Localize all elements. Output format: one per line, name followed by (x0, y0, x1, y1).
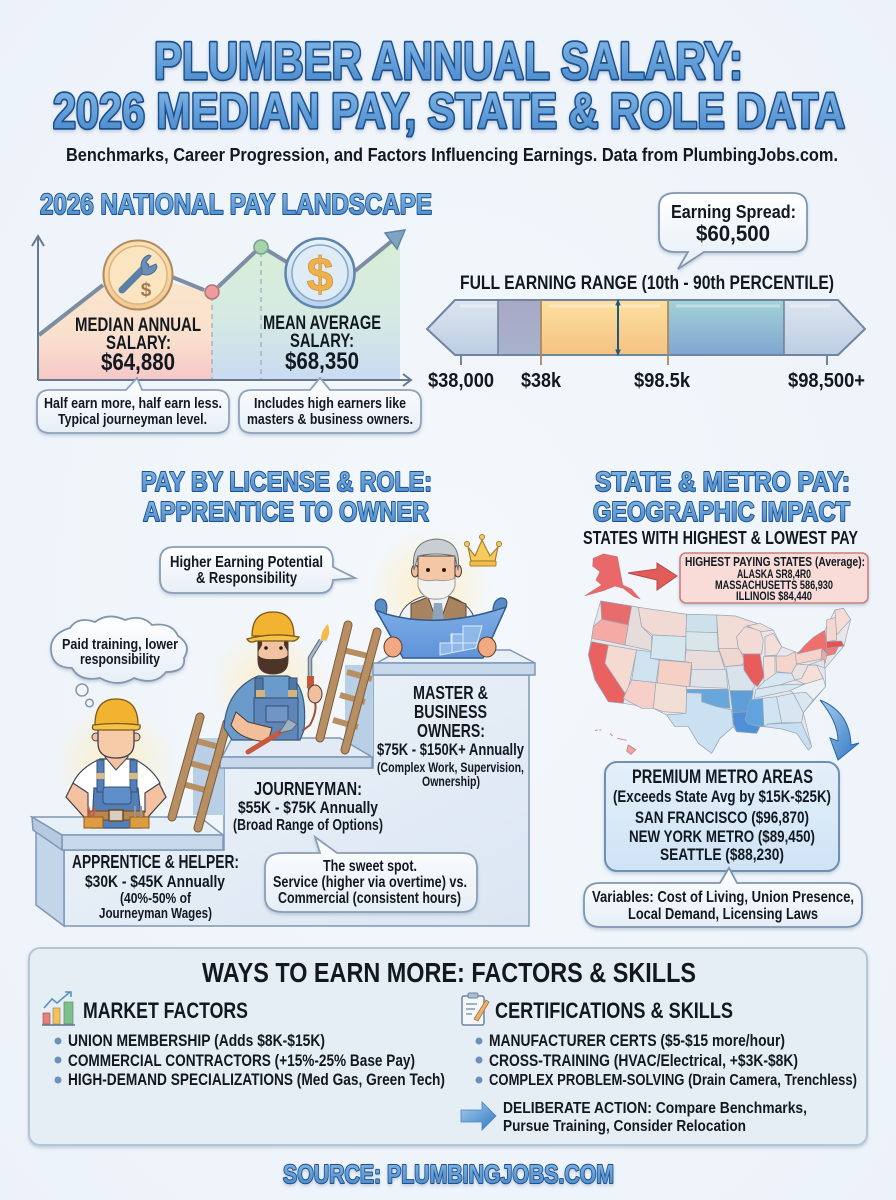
callout: thought cloud (51, 616, 187, 707)
callout: median note: Half earn more, half earn less. (44, 395, 222, 412)
panel: premium metro areas: NEW YORK METRO ($89,450) (629, 827, 815, 846)
stat: median salary: $64,880 (101, 349, 175, 376)
icon: torch (302, 624, 329, 731)
label: journeyman (233, 779, 383, 834)
callout: thought cloud: responsibility (80, 651, 161, 668)
callout: thought cloud: Paid training, lower (62, 636, 178, 653)
heading: pay by license and role: APPRENTICE TO OWNER (143, 496, 429, 527)
callout: earning spread: Earning Spread: (671, 202, 796, 222)
label: journeyman: JOURNEYMAN: (254, 779, 362, 799)
callout: highest paying states (680, 553, 868, 603)
stat: mean salary (263, 312, 381, 375)
callout: the sweet spot: Commercial (consistent hours) (278, 890, 461, 907)
callout: earning spread (659, 193, 807, 269)
alaska (585, 554, 640, 599)
stat: mean salary: $68,350 (285, 348, 359, 375)
icon: dollar medal: $ (307, 249, 334, 302)
label: master and business owners: MASTER & (413, 683, 488, 703)
list: certifications and skills: CROSS-TRAINING (HVAC/Electrical, +$3K-$8K) (489, 1052, 798, 1070)
list: certifications and skills (476, 1032, 857, 1089)
callout: mean note: Includes high earners like (254, 395, 406, 412)
icon: ladder two (320, 625, 377, 750)
character: master and owner (368, 528, 507, 658)
list: market factors: UNION MEMBERSHIP (Adds $8K-$15K) (68, 1032, 325, 1050)
icon: wrench medal (104, 240, 172, 310)
callout: higher earning potential: Higher Earning Potential (170, 554, 323, 571)
title: PLUMBER ANNUAL SALARY: (154, 32, 743, 91)
heading: national pay landscape: 2026 NATIONAL PAY LANDSCAPE (40, 189, 432, 221)
panel: premium metro areas (605, 762, 839, 871)
callout: highest paying states: ILLINOIS $84,440 (736, 591, 812, 603)
callout: median note: Typical journeyman level. (58, 411, 207, 428)
axis labels: $38k (521, 370, 562, 392)
panel: premium metro areas: PREMIUM METRO AREAS (632, 767, 813, 788)
label: master and business owners (377, 683, 525, 789)
heading: state and metro pay: GEOGRAPHIC IMPACT (593, 496, 850, 527)
label: apprentice and helper (72, 852, 239, 922)
heading: pay by license and role: PAY BY LICENSE & ROLE: (141, 466, 432, 497)
step walls (32, 650, 535, 926)
chart: pay line chart (32, 230, 411, 386)
arrow: blue curved to metro (820, 700, 859, 760)
label: journeyman: (Broad Range of Options) (233, 817, 383, 834)
text: deliberate action: Pursue Training, Consider Relocation (503, 1118, 746, 1135)
axes (32, 236, 411, 386)
label: apprentice and helper: Journeyman Wages) (99, 906, 212, 922)
icon: bar chart (42, 992, 75, 1025)
icon: dollar medal (286, 238, 354, 308)
callout: highest paying states: MASSACHUSETTS 586,930 (715, 580, 833, 592)
callout: higher earning potential: & Responsibility (196, 570, 297, 587)
callout: the sweet spot: Service (higher via overtime) vs. (273, 874, 467, 891)
callout: mean note: masters & business owners. (247, 411, 413, 428)
callout: variables: Local Demand, Licensing Laws (628, 906, 818, 923)
icon: blueprint (375, 598, 507, 658)
icon: wrench medal: $ (141, 280, 152, 301)
callout: earning spread: $60,500 (696, 221, 770, 246)
panel: premium metro areas: SEATTLE ($88,230) (660, 845, 784, 864)
icon: clipboard (462, 993, 489, 1025)
callout: higher earning potential (160, 547, 355, 593)
icon: ladder one (172, 717, 227, 828)
stat: mean salary: MEAN AVERAGE (263, 312, 381, 334)
callout: the sweet spot: The sweet spot. (323, 858, 417, 875)
panel: career staircase (32, 528, 535, 926)
callout: variables (584, 868, 862, 927)
label: master and business owners: Ownership) (422, 773, 480, 789)
step 1 top (32, 817, 223, 835)
marker: green point (254, 240, 268, 254)
label: master and business owners: BUSINESS (414, 702, 487, 722)
panel: premium metro areas: SAN FRANCISCO ($96,870) (635, 808, 809, 827)
step 2 top (222, 738, 372, 757)
panel: ways to earn more (29, 948, 867, 1145)
heading: state and metro pay: STATE & METRO PAY: (595, 466, 850, 497)
axis labels: $98,500+ (788, 370, 865, 392)
character: journeyman (210, 612, 330, 752)
title (53, 32, 845, 139)
icon: crown (464, 534, 502, 566)
heading: certifications and skills: CERTIFICATIONS & SKILLS (495, 998, 733, 1023)
marker: red point (205, 285, 219, 299)
list: market factors: HIGH-DEMAND SPECIALIZATIONS (Med Gas, Green Tech) (68, 1071, 445, 1089)
axis labels (428, 370, 865, 392)
callout: median note (37, 378, 229, 433)
heading: pay by license and role (141, 466, 432, 527)
list: certifications and skills: MANUFACTURER CERTS ($5-$15 more/hour) (489, 1032, 785, 1050)
label: journeyman: $55K - $75K Annually (238, 798, 378, 817)
heading: state and metro pay (593, 466, 850, 527)
stat: mean salary: SALARY: (290, 330, 354, 352)
label: apprentice and helper: (40%-50% of (120, 891, 191, 907)
label: master and business owners: $75K - $150K+ Annually (377, 741, 525, 759)
callout: highest paying states: ALASKA SR8,4R0 (737, 569, 811, 581)
panel: premium metro areas: (Exceeds State Avg by $15K-$25K) (613, 788, 831, 806)
label: apprentice and helper: $30K - $45K Annually (85, 872, 225, 891)
chart: percentile range bar (427, 300, 865, 392)
stat: median salary: MEDIAN ANNUAL (75, 314, 201, 336)
label: master and business owners: (Complex Work, Supervision, (377, 759, 524, 775)
hawaii (595, 730, 636, 754)
axis labels: $38,000 (428, 370, 494, 392)
stat: median salary: SALARY: (106, 332, 171, 354)
map: united states pay map (585, 554, 851, 754)
text: deliberate action: DELIBERATE ACTION: Compare Benchmarks, (503, 1100, 807, 1117)
heading: market factors: MARKET FACTORS (83, 998, 248, 1023)
text: deliberate action (503, 1100, 807, 1135)
step 3 top (377, 650, 535, 663)
list: market factors: COMMERCIAL CONTRACTORS (+15%-25% Base Pay) (68, 1052, 415, 1070)
label: master and business owners: OWNERS: (417, 721, 485, 741)
character: apprentice (53, 699, 177, 828)
callout: the sweet spot (265, 837, 477, 912)
axis labels: $98.5k (634, 370, 691, 392)
label: apprentice and helper: APPRENTICE & HELPER: (72, 852, 239, 872)
arrow: deliberate action (461, 1102, 496, 1130)
arrow: red to highest paying (628, 563, 677, 590)
source footer: SOURCE: PLUMBINGJOBS.COM (283, 1159, 614, 1189)
callout: mean note (239, 378, 421, 433)
heading: ways to earn more: WAYS TO EARN MORE: FACTORS & SKILLS (202, 957, 696, 988)
stat: median salary (75, 314, 201, 376)
list: market factors (54, 1032, 445, 1089)
